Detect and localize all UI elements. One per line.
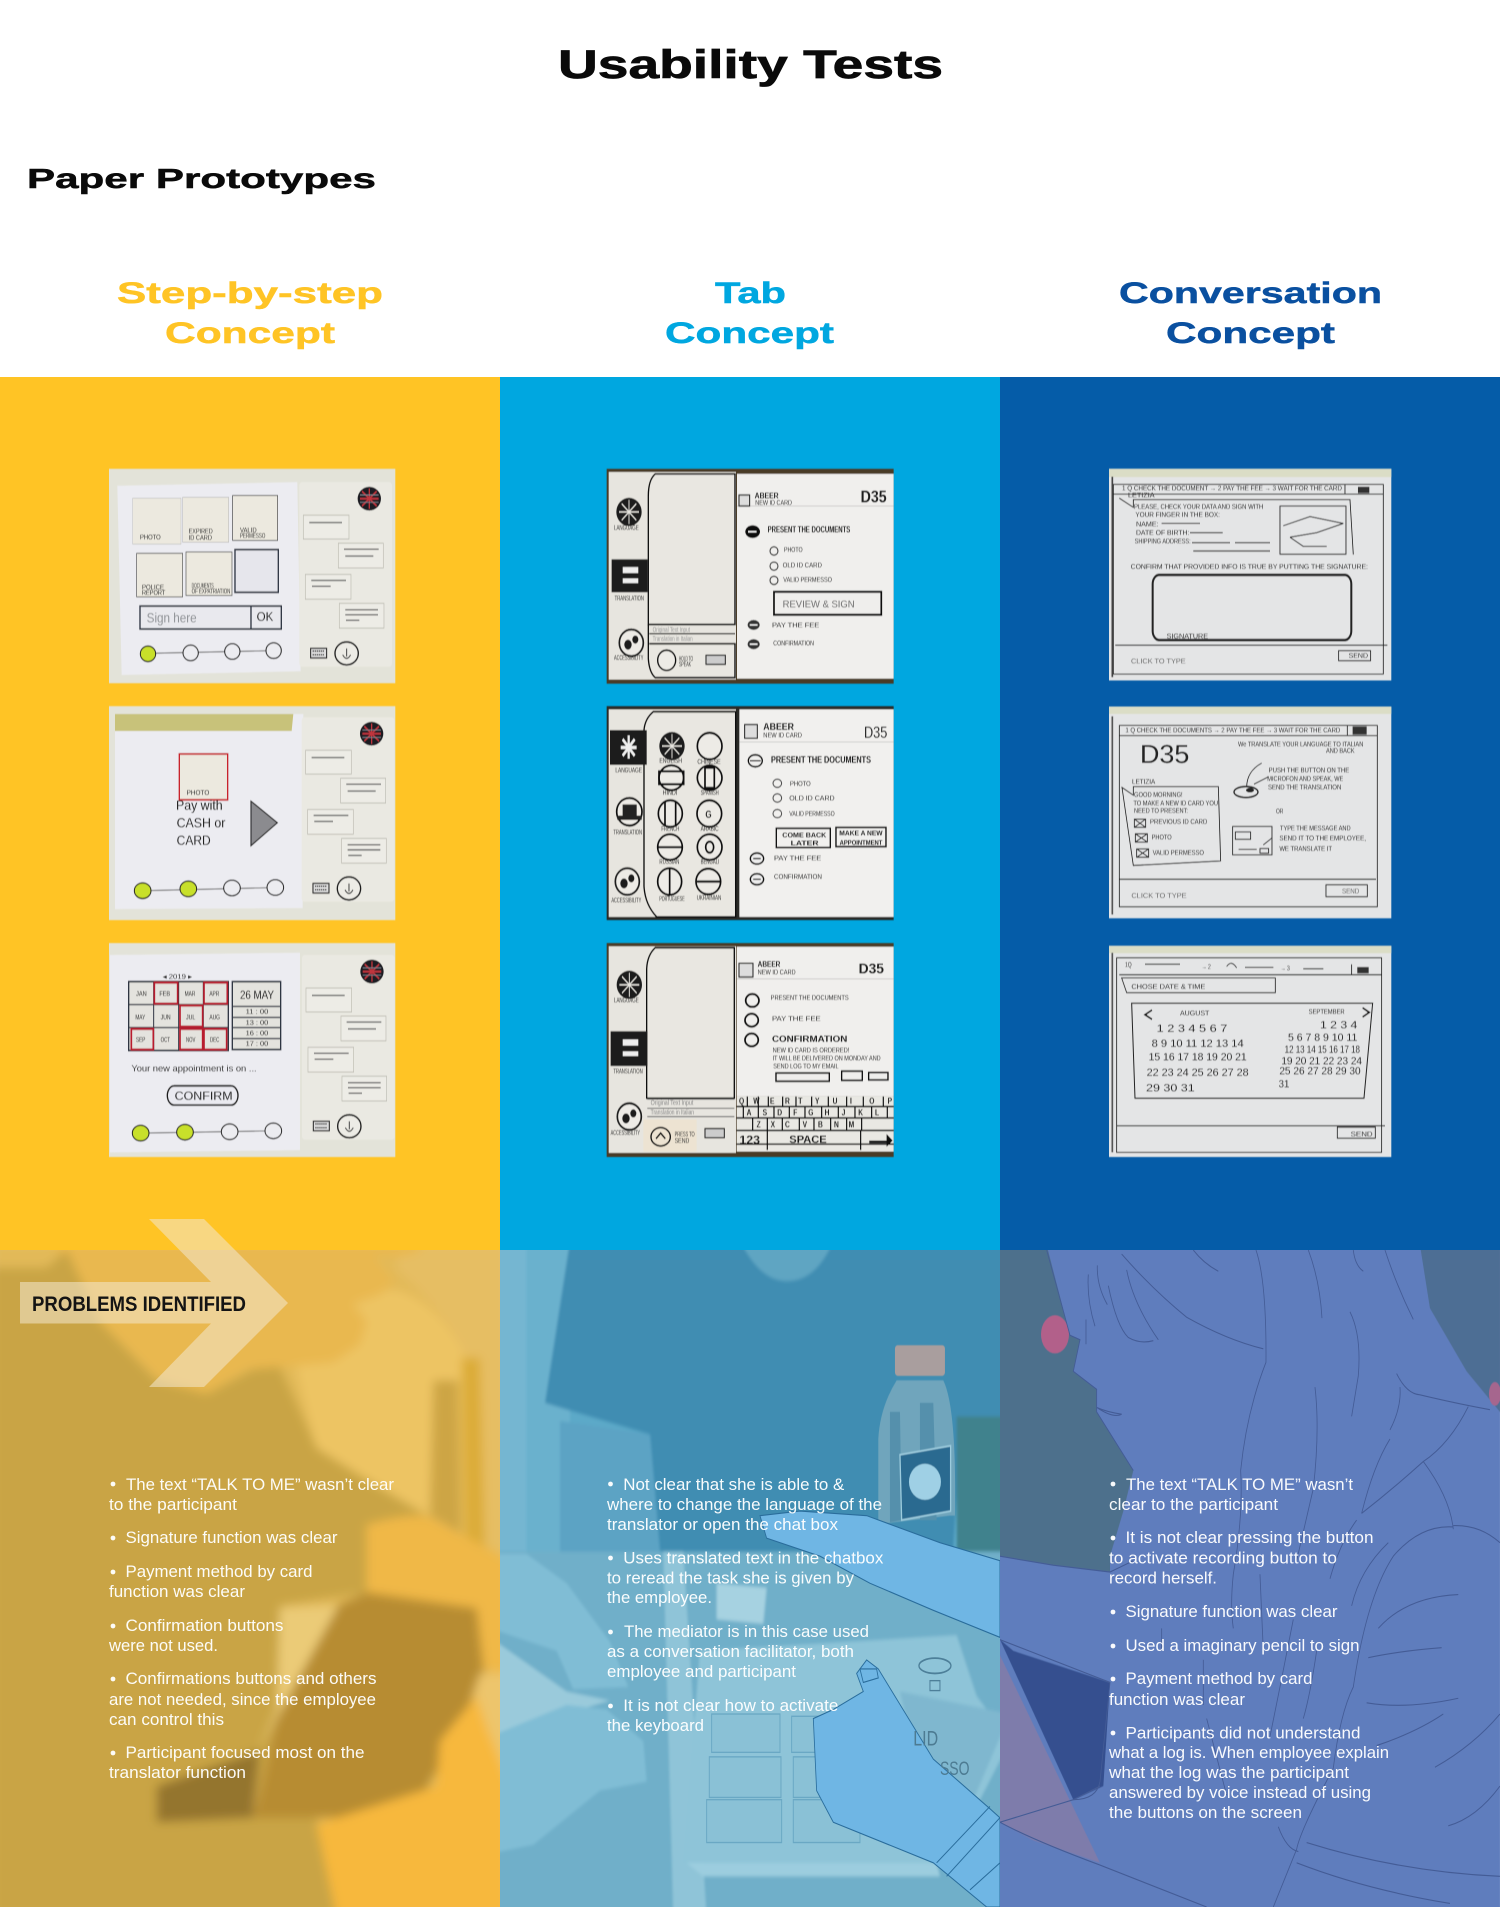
- prototype photo: confirmation with keyboard: ACCESSIBILITY: [611, 1130, 640, 1137]
- prototype photo: choose date and time: → 2: [1202, 964, 1211, 971]
- text block: step-by-step findings: Confirmations buttons and others: [126, 1670, 376, 1688]
- prototype photo: language picker: G: [705, 809, 712, 822]
- prototype photo: confirmation with keyboard: SEND LOG TO MY EMAIL: [773, 1064, 839, 1071]
- text block: step-by-step findings: translator function: [109, 1764, 246, 1782]
- panel: tab colour column: [500, 377, 1000, 1250]
- hand on prototype illustration: [813, 1660, 1000, 1907]
- prototype photo: choose date and time: CHOSE DATE & TIME: [1131, 984, 1205, 991]
- prototype photo: present the documents: PRESENT THE DOCUMENTS: [768, 525, 850, 535]
- text block: tab concept findings: translator or open the chat box: [607, 1516, 839, 1534]
- prototype photo: sign here: OF EXPATRIATION: [192, 589, 230, 596]
- prototype photo: language picker: ACCESSIBILITY: [611, 898, 641, 905]
- prototype photo: language picker: ENGLISH: [659, 759, 682, 765]
- prototype photo: confirmation with keyboard: G: [808, 1108, 814, 1118]
- prototype photo: choose date and time: AUGUST: [1180, 1011, 1210, 1018]
- prototype photo: confirmation with keyboard: J: [842, 1108, 845, 1118]
- prototype photo: sign here: ID CARD: [189, 535, 213, 542]
- prototype photo: confirmation with keyboard: D: [777, 1108, 782, 1118]
- prototype photo: signature form: NAME:: [1136, 522, 1159, 529]
- prototype photo: confirmation with keyboard: X: [771, 1120, 776, 1130]
- prototype photo: sign here: OK: [257, 610, 274, 624]
- prototype photo: language picker: [607, 706, 894, 920]
- text block: step-by-step findings: function was clear: [109, 1583, 246, 1601]
- text block: conversation concept findings: The text “TALK TO ME” wasn’t: [1126, 1476, 1353, 1494]
- prototype photo: language picker: VALID PERMESSO: [789, 811, 835, 818]
- text block: conversation concept findings: answered by voice instead of using: [1109, 1784, 1371, 1802]
- prototype photo: choose date and time: 29 30 31: [1146, 1082, 1195, 1095]
- prototype photo: appointment calendar: SEP: [136, 1037, 145, 1044]
- prototype photo: language picker: HINDI: [663, 791, 678, 798]
- text block: conversation concept findings: Participants did not understand: [1126, 1724, 1360, 1742]
- text block: tab concept findings: Not clear that she is able to &: [623, 1476, 844, 1494]
- prototype photo: language picker: D35: [864, 724, 887, 742]
- prototype photo: present the documents: REVIEW & SIGN: [783, 598, 855, 610]
- prototype photo: signature form: CLICK TO TYPE: [1131, 659, 1186, 666]
- panel: step-by-step colour column: [0, 377, 500, 1250]
- text block: tab concept findings: to reread the task she is given by: [607, 1570, 855, 1588]
- prototype photo: confirmation with keyboard: H: [825, 1108, 830, 1118]
- prototype photo: language picker: CONFIRMATION: [774, 874, 822, 881]
- prototype photo: language picker: RUSSIAN: [659, 860, 679, 866]
- prototype photo: choose date and time: SEND: [1351, 1132, 1374, 1139]
- prototype photo: language picker: PRESENT THE DOCUMENTS: [771, 754, 871, 765]
- text block: step-by-step findings: Confirmation buttons: [126, 1617, 284, 1635]
- prototype photo: appointment calendar: 17 : 00: [246, 1041, 269, 1048]
- prototype photo: welcome message and translator: PREVIOUS ID CARD: [1150, 820, 1208, 826]
- prototype photo: appointment calendar: 16 : 00: [246, 1031, 269, 1038]
- prototype photo: confirmation with keyboard: T: [798, 1096, 802, 1106]
- prototype photo: appointment calendar: OCT: [161, 1038, 170, 1045]
- prototype photo: appointment calendar: JAN: [136, 991, 147, 998]
- prototype photo: appointment calendar: JUN: [161, 1015, 171, 1022]
- prototype photo: language picker: LATER: [791, 840, 819, 848]
- prototype photo: language picker: PAY THE FEE: [774, 856, 821, 863]
- text block: tab concept findings: as a conversation facilitator, both: [607, 1643, 854, 1661]
- prototype photo: welcome message and translator: SEND IT TO THE EMPLOYEE,: [1279, 836, 1366, 843]
- prototype photo: present the documents: PHOTO: [784, 547, 803, 554]
- prototypes: tab concept: [607, 469, 894, 1157]
- photo: participant tinted yellow: [0, 1241, 510, 1907]
- prototypes: step-by-step concept: [109, 469, 395, 1157]
- prototype photo: confirmation with keyboard: E: [770, 1096, 775, 1106]
- prototype photo: welcome message and translator: NEED TO PRESENT:: [1134, 809, 1188, 815]
- text block: step-by-step findings: are not needed, since the employee: [109, 1691, 376, 1709]
- prototype photo: present the documents: HOLD TO: [679, 657, 693, 663]
- prototype photo: appointment calendar: [109, 943, 395, 1157]
- prototype photo: confirmation with keyboard: 123: [739, 1135, 760, 1148]
- prototype photo: sign here: POLICE: [142, 585, 164, 592]
- prototype photo: welcome message and translator: PHOTO: [1152, 835, 1172, 842]
- photo: sketched participant tinted blue: [1000, 1245, 1500, 1907]
- prototype photo: choose date and time: → 3: [1281, 966, 1290, 973]
- prototype photo: choose date and time: 22 23 24 25 26 27 28: [1147, 1067, 1249, 1080]
- prototype photo: appointment calendar: APR: [209, 991, 220, 998]
- prototype photo: confirmation with keyboard: TRANSLATION: [613, 1069, 643, 1076]
- panel: conversation colour column: [1000, 377, 1500, 1250]
- prototype photo: confirmation with keyboard: PAY THE FEE: [772, 1017, 821, 1023]
- prototype photo: choose date and time: 19 20 21 22 23 24: [1281, 1055, 1363, 1068]
- heading: step-by-step concept: Step-by-step: [117, 277, 383, 310]
- prototype photo: appointment calendar: MAR: [185, 991, 196, 998]
- prototype photo: appointment calendar: MAY: [135, 1015, 145, 1022]
- heading: step-by-step concept: [117, 277, 383, 350]
- text block: conversation concept findings: function was clear: [1109, 1691, 1246, 1709]
- prototype photo: confirmation with keyboard: V: [803, 1120, 808, 1130]
- prototype photo: language picker: UKRAINIAN: [697, 895, 721, 902]
- prototype photo: signature form: [1109, 469, 1391, 680]
- prototype photo: sign here: [109, 469, 395, 683]
- prototype photo: sign here: DOCUMENTS: [192, 584, 214, 590]
- prototype photo: present the documents: D35: [861, 487, 887, 507]
- prototype photo: welcome message and translator: CLICK TO TYPE: [1131, 894, 1187, 900]
- text block: conversation concept findings: the buttons on the screen: [1109, 1804, 1302, 1822]
- text block: conversation concept findings: Signature function was clear: [1126, 1603, 1338, 1621]
- text block: step-by-step findings: Participant focused most on the: [126, 1744, 364, 1762]
- heading: conversation concept: Conversation: [1119, 277, 1382, 310]
- prototype photo: choose date and time: 1 2 3 4: [1320, 1019, 1358, 1032]
- text block: step-by-step findings: were not used.: [108, 1637, 218, 1655]
- prototype photo: sign here: PHOTO: [140, 535, 161, 542]
- text block: step-by-step findings: to the participant: [109, 1496, 237, 1514]
- prototype photo: confirmation with keyboard: PRESENT THE DOCUMENTS: [771, 995, 849, 1002]
- text block: tab concept findings: It is not clear how to activate: [623, 1697, 838, 1715]
- prototype photo: sign here: PERMESSO: [240, 534, 266, 540]
- prototype photo: confirmation with keyboard: ABEER: [758, 961, 780, 969]
- prototype photo: language picker: BENGALI: [701, 860, 720, 866]
- prototype photo: welcome message and translator: OR: [1276, 809, 1284, 816]
- heading: conversation concept: [1119, 277, 1382, 350]
- text block: conversation concept findings: It is not clear pressing the button: [1126, 1529, 1374, 1547]
- prototype photo: language picker: ABEER: [763, 721, 795, 732]
- prototype photo: sign here: Sign here: [147, 610, 197, 626]
- prototype photo: confirmation with keyboard: B: [818, 1120, 823, 1130]
- prototype photo: confirmation with keyboard: SEND: [675, 1138, 690, 1145]
- prototype photo: language picker: ARABIC: [701, 826, 719, 833]
- heading: tab concept: Concept: [665, 317, 834, 350]
- prototype photo: appointment calendar: 26 MAY: [240, 990, 274, 1003]
- prototype photo: appointment calendar: DEC: [210, 1037, 220, 1044]
- text block: step-by-step findings: can control this: [109, 1711, 224, 1729]
- prototype photo: language picker: NEW ID CARD: [763, 733, 803, 740]
- prototype photo: choose date and time: 12 13 14 15 16 17 18: [1285, 1044, 1360, 1056]
- prototype photo: pay with cash or card: CARD: [177, 832, 211, 848]
- prototype photo: confirmation with keyboard: R: [785, 1096, 790, 1106]
- prototype photo: confirmation with keyboard: Original Text Input: [651, 1101, 694, 1107]
- prototype photo: choose date and time: 15 16 17 18 19 20 21: [1149, 1051, 1247, 1064]
- prototype photo: confirmation with keyboard: L: [875, 1108, 879, 1118]
- prototype photo: signature form: LETIZIA: [1128, 493, 1155, 500]
- prototype photo: present the documents: [607, 469, 894, 684]
- heading: conversation concept: Concept: [1166, 317, 1335, 350]
- callout: problems identified arrow: [20, 1219, 288, 1387]
- prototype photo: confirmation with keyboard: A: [747, 1108, 752, 1118]
- heading: tab concept: [665, 277, 834, 350]
- prototype photo: present the documents: CONFIRMATION: [773, 641, 814, 648]
- prototype photo: confirmation with keyboard: PRESS TO: [675, 1132, 695, 1139]
- text block: conversation concept findings: what the log was the participant: [1108, 1764, 1349, 1782]
- prototype photo: present the documents: PAY THE FEE: [772, 623, 819, 630]
- prototype photo: confirmation with keyboard: K: [858, 1108, 863, 1118]
- prototype photo: welcome message and translator: We TRANSLATE YOUR LANGUAGE TO ITALIAN: [1238, 742, 1363, 749]
- text block: tab concept findings: the employee.: [607, 1589, 712, 1607]
- prototype photo: present the documents: NEW ID CARD: [755, 501, 793, 507]
- prototype photo: present the documents: SPEAK: [679, 662, 691, 669]
- prototype photo: welcome message and translator: SEND: [1342, 889, 1360, 896]
- prototype photo: appointment calendar: ◂ 2019 ▸: [163, 973, 192, 981]
- prototype photo: confirmation with keyboard: Translation in Italian: [651, 1110, 694, 1117]
- prototype photo: signature form: SHIPPING ADDRESS:: [1135, 539, 1191, 546]
- prototype photo: confirmation with keyboard: Q: [739, 1096, 744, 1106]
- prototype photo: choose date and time: 5 6 7 8 9 10 11: [1288, 1032, 1357, 1044]
- prototype photo: language picker: CHINESE: [697, 759, 721, 766]
- prototype photo: sign here: VALID: [240, 528, 257, 535]
- text block: step-by-step findings: Payment method by card: [126, 1563, 312, 1581]
- prototype photo: appointment calendar: Your new appointment is on ...: [131, 1062, 257, 1074]
- prototype photo: welcome message and translator: AND BACK: [1326, 748, 1355, 755]
- prototype photo: choose date and time: 1 2 3 4 5 6 7: [1157, 1023, 1227, 1036]
- prototype photo: language picker: MAKE A NEW: [839, 830, 884, 838]
- prototype photo: appointment calendar: JUL: [186, 1015, 196, 1022]
- text block: conversation concept findings: to activate recording button to: [1109, 1550, 1337, 1568]
- prototype photo: confirmation with keyboard: S: [763, 1108, 768, 1118]
- prototype photo: confirmation with keyboard: P: [888, 1096, 893, 1106]
- prototype photo: appointment calendar: FEB: [159, 991, 170, 998]
- prototype photo: signature form: SIGNATURE: [1167, 634, 1208, 641]
- text block: tab concept findings: employee and participant: [607, 1663, 796, 1681]
- text block: conversation concept findings: Used a imaginary pencil to sign: [1126, 1637, 1360, 1655]
- prototype photo: choose date and time: 31: [1279, 1079, 1289, 1091]
- prototype photo: choose date and time: 25 26 27 28 29 30: [1279, 1065, 1361, 1078]
- text block: step-by-step findings: Signature function was clear: [126, 1529, 338, 1547]
- prototype photo: sign here: EXPIRED: [189, 529, 213, 536]
- prototype photo: welcome message and translator: PUSH THE BUTTON ON THE: [1269, 768, 1349, 775]
- prototype photo: appointment calendar: AUG: [209, 1015, 220, 1022]
- prototype photo: confirmation with keyboard: CONFIRMATION: [772, 1034, 848, 1045]
- prototype photo: pay with cash or card: CASH or: [177, 815, 225, 831]
- text block: conversation concept findings: clear to the participant: [1109, 1496, 1278, 1514]
- text block: tab concept findings: where to change the language of the: [606, 1496, 882, 1514]
- prototype photo: confirmation with keyboard: I: [850, 1096, 852, 1106]
- prototype photo: language picker: TRANSLATION: [613, 830, 642, 837]
- prototype photo: confirmation with keyboard: C: [785, 1120, 790, 1130]
- prototype photo: present the documents: ACCESSIBILITY: [614, 655, 643, 662]
- prototype photo: welcome message and translator: SEND THE TRANSLATION: [1268, 785, 1341, 792]
- prototype photo: confirmation with keyboard: Y: [815, 1096, 820, 1106]
- prototype photo: pay with cash or card: [109, 706, 395, 920]
- prototype photo: present the documents: ABEER: [755, 491, 779, 501]
- prototype photo: language picker: PHOTO: [790, 781, 811, 788]
- prototype photo: signature form: 1 Q CHECK THE DOCUMENT → 2 PAY THE FEE → 3 WAIT FOR THE CARD: [1122, 486, 1343, 493]
- photo: tester and paper prototype tinted cyan: SSO: [940, 1758, 970, 1779]
- prototype photo: welcome message and translator: 1 Q CHECK THE DOCUMENTS → 2 PAY THE FEE → 3 WAIT FOR THE CARD: [1125, 728, 1341, 735]
- prototype photo: confirmation with keyboard: O: [869, 1096, 874, 1106]
- text block: conversation concept findings: [1108, 1476, 1389, 1822]
- prototype photo: appointment calendar: 13 : 00: [246, 1021, 269, 1028]
- prototype photo: welcome message and translator: TO MAKE A NEW ID CARD YOU: [1133, 801, 1218, 808]
- text block: conversation concept findings: what a log is. When employee explain: [1108, 1744, 1389, 1762]
- prototype photo: confirmation with keyboard: Z: [757, 1120, 761, 1130]
- prototype photo: choose date and time: [1109, 946, 1391, 1157]
- prototype photo: confirmation with keyboard: M: [849, 1120, 854, 1130]
- prototype photo: present the documents: VALID PERMESSO: [783, 578, 832, 585]
- prototype photo: signature form: YOUR FINGER IN THE BOX:: [1135, 512, 1220, 519]
- prototype photo: welcome message and translator: MICROFON AND SPEAK, WE: [1267, 776, 1343, 783]
- prototype photo: confirmation with keyboard: F: [793, 1108, 797, 1118]
- prototype photo: language picker: SPANISH: [701, 791, 719, 798]
- callout: problems identified arrow: PROBLEMS IDENTIFIED: [32, 1293, 246, 1316]
- heading: tab concept: Tab: [715, 277, 786, 310]
- prototype photo: appointment calendar: NOV: [186, 1038, 195, 1045]
- text block: conversation concept findings: record herself.: [1109, 1570, 1217, 1588]
- heading: step-by-step concept: Concept: [165, 317, 335, 350]
- prototype photo: welcome message and translator: VALID PERMESSO: [1153, 850, 1204, 857]
- prototype photo: welcome message and translator: LETIZIA: [1132, 780, 1155, 787]
- section heading: paper prototypes: Paper Prototypes: [27, 163, 376, 194]
- prototype photo: language picker: OLD ID CARD: [789, 796, 835, 803]
- prototype photo: sign here: REPORT: [142, 590, 166, 597]
- prototype photo: present the documents: LANGUAGE: [614, 525, 639, 532]
- prototype photo: confirmation with keyboard: N: [834, 1120, 839, 1130]
- prototype photo: choose date and time: 8 9 10 11 12 13 14: [1152, 1038, 1244, 1050]
- text block: tab concept findings: The mediator is in this case used: [624, 1623, 869, 1641]
- prototype photo: welcome message and translator: GOOD MORNING!: [1134, 793, 1183, 799]
- prototype photo: welcome message and translator: [1109, 707, 1391, 918]
- text block: tab concept findings: [606, 1476, 884, 1735]
- prototype photo: confirmation with keyboard: D35: [859, 960, 884, 977]
- prototype photo: confirmation with keyboard: IT WILL BE DELIVERED ON MONDAY AND: [773, 1056, 881, 1063]
- prototype photo: language picker: COME BACK: [782, 832, 827, 840]
- prototype photo: present the documents: Original Text Input: [653, 627, 690, 634]
- prototype photo: confirmation with keyboard: W: [753, 1096, 760, 1106]
- prototype photo: choose date and time: SEPTEMBER: [1309, 1009, 1345, 1016]
- text block: tab concept findings: the keyboard: [607, 1717, 704, 1735]
- prototype photo: appointment calendar: CONFIRM: [175, 1091, 233, 1104]
- prototype photo: welcome message and translator: WE TRANSLATE IT: [1279, 846, 1332, 853]
- prototype photo: confirmation with keyboard: NEW ID CARD: [758, 970, 796, 977]
- prototype photo: choose date and time: 1Q: [1125, 962, 1132, 969]
- prototype photo: language picker: LANGUAGE: [615, 768, 642, 775]
- photo: tester and paper prototype tinted cyan: [490, 1241, 1010, 1907]
- prototype photo: pay with cash or card: PHOTO: [187, 791, 210, 798]
- prototype photo: appointment calendar: 11 : 00: [246, 1010, 269, 1017]
- prototype photo: language picker: APPOINTMENT: [840, 839, 882, 847]
- title: Usability Tests: [558, 43, 943, 87]
- prototype photo: pay with cash or card: Pay with: [176, 797, 223, 813]
- text block: tab concept findings: Uses translated text in the chatbox: [623, 1550, 884, 1568]
- hand illustration: [760, 1511, 1000, 1637]
- prototype photo: signature form: CONFIRM THAT PROVIDED INFO IS TRUE BY PUTTING THE SIGNATURE:: [1131, 564, 1368, 571]
- prototype photo: signature form: SEND: [1349, 653, 1369, 660]
- prototype photo: signature form: DATE OF BIRTH:: [1136, 530, 1190, 537]
- prototype photo: signature form: PLEASE, CHECK YOUR DATA AND SIGN WITH: [1134, 505, 1263, 512]
- prototype photo: confirmation with keyboard: LANGUAGE: [614, 998, 639, 1005]
- prototype photo: confirmation with keyboard: [607, 943, 894, 1157]
- prototype photo: present the documents: OLD ID CARD: [783, 563, 823, 570]
- text block: step-by-step findings: The text “TALK TO ME” wasn’t clear: [126, 1476, 395, 1494]
- prototype photo: language picker: FRENCH: [661, 826, 679, 833]
- prototype photo: confirmation with keyboard: U: [833, 1096, 838, 1106]
- prototypes: conversation concept: [1109, 469, 1391, 1157]
- text block: conversation concept findings: Payment method by card: [1126, 1670, 1312, 1688]
- water bottle: [878, 1345, 955, 1525]
- prototype photo: present the documents: TRANSLATION: [615, 596, 644, 603]
- prototype photo: language picker: PORTUGUESE: [659, 896, 685, 903]
- prototype photo: present the documents: Translation in Italian: [653, 636, 693, 643]
- prototype photo: confirmation with keyboard: SPACE: [789, 1134, 827, 1147]
- photo: tester and paper prototype tinted cyan: LID: [913, 1727, 938, 1751]
- text block: step-by-step findings: [108, 1476, 395, 1782]
- prototype photo: confirmation with keyboard: NEW ID CARD IS ORDERED!: [773, 1048, 850, 1055]
- prototype photo: welcome message and translator: TYPE THE MESSAGE AND: [1280, 826, 1351, 833]
- prototype photo: welcome message and translator: D35: [1140, 740, 1189, 769]
